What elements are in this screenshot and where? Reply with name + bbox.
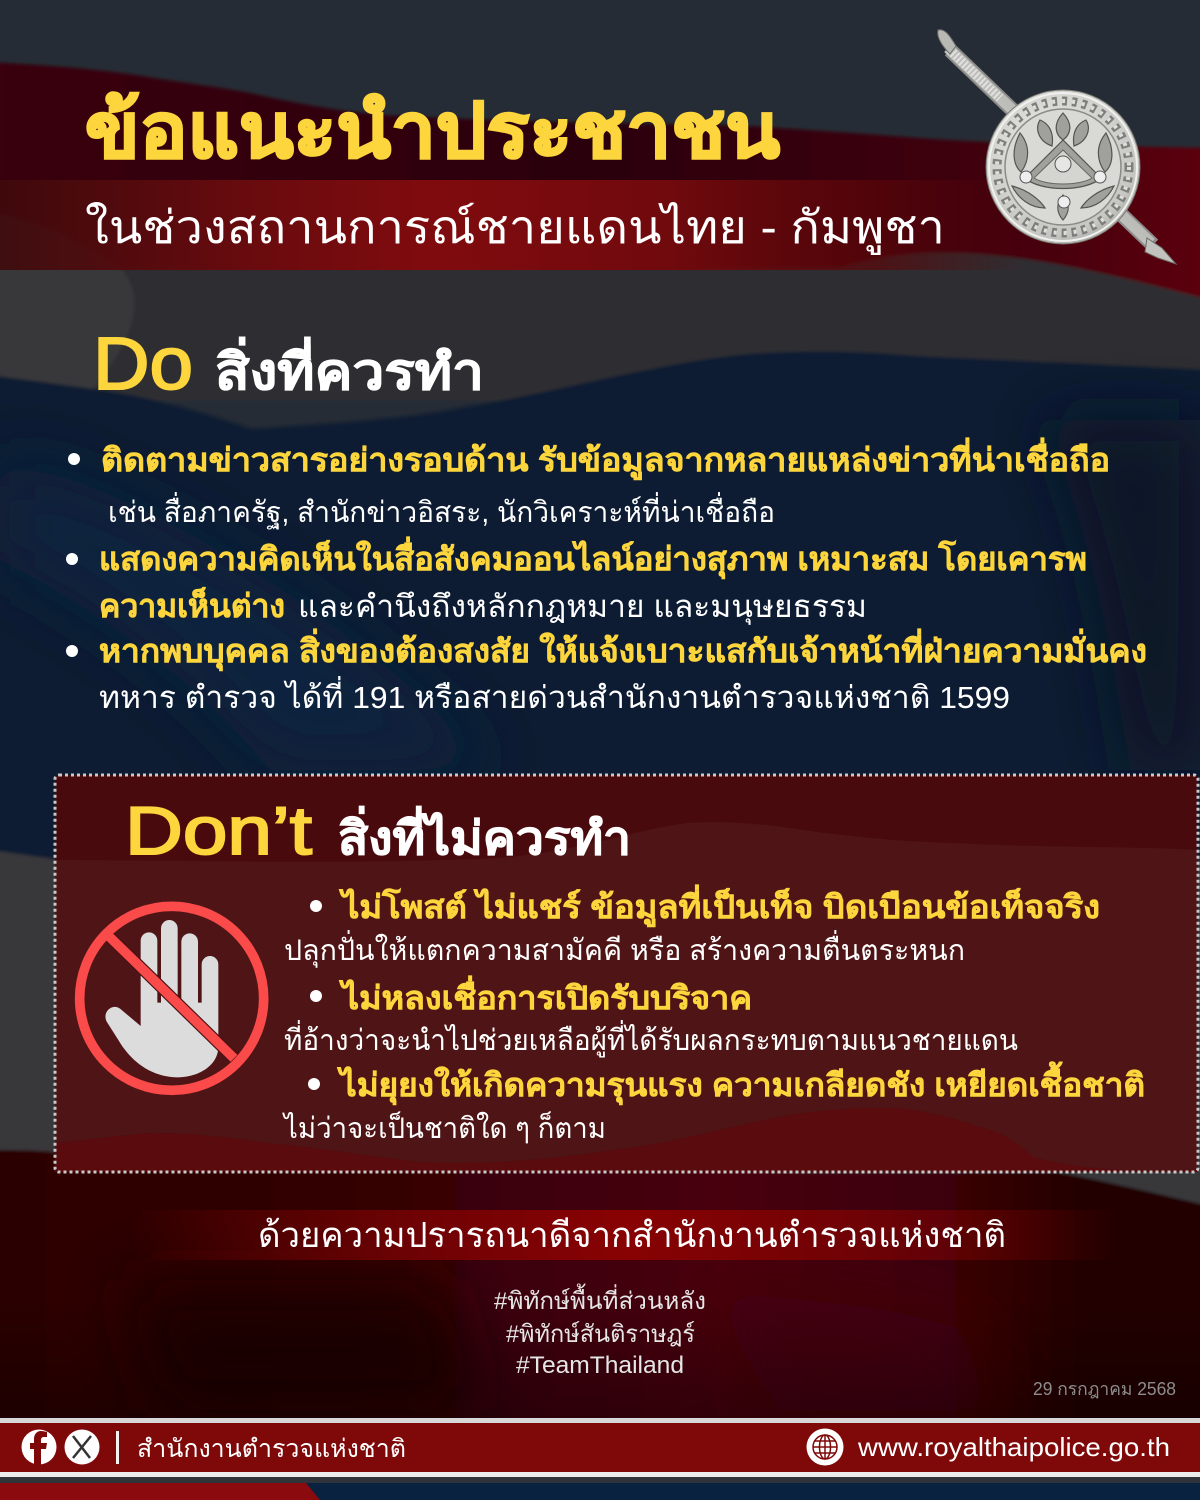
subtitle: ในช่วงสถานการณ์ชายแดนไทย - กัมพูชา — [85, 201, 945, 255]
item 3 — [66, 628, 1147, 715]
heading: Do: Do — [93, 322, 193, 405]
item 2: แสดงความคิดเห็นในสื่อสังคมออนไลน์อย่างสุภาพ เหมาะสม โดยเคารพ — [99, 536, 1087, 580]
item 3: ทหาร ตำรวจ ได้ที่ 191 หรือสายด่วนสำนักงานตำรวจแห่งชาติ 1599 — [99, 676, 1010, 715]
title: ข้อแนะนำประชาชน — [85, 89, 780, 174]
item 1: ติดตามข่าวสารอย่างรอบด้าน รับข้อมูลจากหลายแหล่งข่าวที่น่าเชื่อถือ — [101, 437, 1110, 481]
heading: Don't: สิ่งที่ไม่ควรทำ — [338, 806, 631, 864]
don't item 2 — [284, 975, 1018, 1058]
footer organisation name: สำนักงานตำรวจแห่งชาติ — [137, 1435, 406, 1463]
icon: globe — [806, 1428, 844, 1466]
don't item 1: ไม่โพสต์ ไม่แชร์ ข้อมูลที่เป็นเท็จ บิดเบือนข้อเท็จจริง — [339, 884, 1100, 928]
closing message band: ด้วยความปรารถนาดีจากสำนักงานตำรวจแห่งชาติ — [258, 1216, 1006, 1255]
item 1 — [68, 437, 1110, 530]
date: 29 กรกฎาคม 2568 — [1033, 1379, 1176, 1399]
don't item 2: ที่อ้างว่าจะนำไปช่วยเหลือผู้ที่ได้รับผลกระทบตามแนวชายแดน — [284, 1020, 1018, 1058]
hashtags: #TeamThailand — [516, 1352, 684, 1379]
item 2 — [66, 536, 1087, 626]
hashtags: #พิทักษ์พื้นที่ส่วนหลัง — [494, 1283, 706, 1315]
heading: Do — [93, 322, 484, 405]
subtitle band — [0, 180, 1030, 270]
icon: X — [64, 1430, 100, 1464]
panel: do list — [66, 437, 1147, 715]
heading: Don't — [125, 793, 631, 869]
footer bar — [0, 1418, 1200, 1500]
icon: facebook — [22, 1430, 56, 1465]
hashtags — [494, 1283, 706, 1379]
don't item 2: ไม่หลงเชื่อการเปิดรับบริจาค — [339, 975, 752, 1016]
website url: www.royalthaipolice.go.th — [857, 1432, 1170, 1462]
item 2: และคำนึงถึงหลักกฎหมาย และมนุษยธรรม — [298, 589, 867, 626]
don't item 3: ไม่ยุยงให้เกิดความรุนแรง ความเกลียดชัง เหยียดเชื้อชาติ — [337, 1061, 1145, 1106]
panel: don't — [55, 775, 1198, 1172]
item 2: ความเห็นต่าง — [99, 586, 285, 624]
icon: prohibited stop hand — [80, 906, 264, 1090]
don't item 3: ไม่ว่าจะเป็นชาติใด ๆ ก็ตาม — [282, 1110, 606, 1145]
don't item 3 — [282, 1061, 1145, 1145]
heading: Don't: Don’t — [125, 793, 312, 869]
don't item 1 — [284, 884, 1100, 968]
hashtags: #พิทักษ์สันติราษฎร์ — [506, 1320, 695, 1348]
don't item 1: ปลุกปั่นให้แตกความสามัคคี หรือ สร้างความตื่นตระหนก — [284, 930, 965, 968]
item 3: หากพบบุคคล สิ่งของต้องสงสัย ให้แจ้งเบาะแสกับเจ้าหน้าที่ฝ่ายความมั่นคง — [99, 628, 1147, 672]
emblem: police shield and baton — [938, 30, 1176, 264]
item 1: เช่น สื่อภาครัฐ, สำนักข่าวอิสระ, นักวิเคราะห์ที่น่าเชื่อถือ — [108, 492, 775, 530]
closing message band — [130, 1210, 1120, 1260]
heading: Do: สิ่งที่ควรทำ — [215, 337, 484, 400]
